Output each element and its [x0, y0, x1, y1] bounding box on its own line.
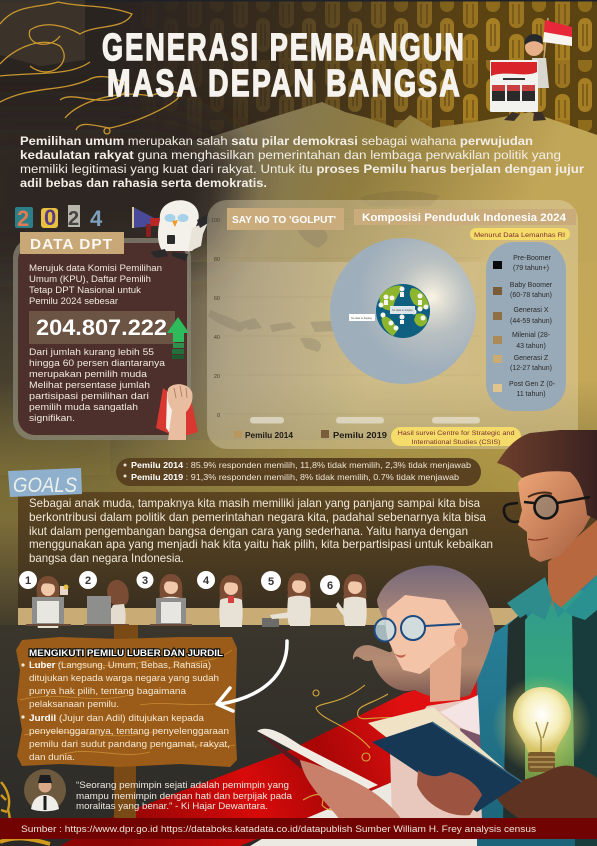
- chart x-axis label pills: [250, 417, 480, 424]
- mega mendung ornament: [0, 2, 179, 134]
- quote: [24, 769, 293, 811]
- book: right: [368, 707, 522, 812]
- gold ornament: [0, 782, 50, 844]
- legend: population groups: Post Gen Z (0-: [509, 381, 556, 388]
- year 2024 cut-out letters: [15, 205, 103, 231]
- girl glasses: [374, 616, 460, 642]
- text block: luber dan jurdil: pelaksanaan pemilu.: [29, 699, 119, 709]
- portrait: Ki Hajar Dewantara: [24, 769, 66, 811]
- statistic: 204.807.222: 204.807.222: [36, 315, 167, 340]
- chart axis: [211, 218, 560, 419]
- chart axis: 0: [217, 413, 220, 419]
- step 2: 2: [85, 575, 91, 587]
- panel: data DPT: [13, 205, 198, 440]
- step 2: [79, 571, 129, 626]
- panel: luber dan jurdil sign: [16, 637, 237, 767]
- callout: pemilu results: Pemilu 2019 : 91,3% responden memilih, 8% tidak memilih, 0.7% tidak menjawab: [131, 473, 459, 482]
- intro paragraph: kedaulatan rakyat guna menghasilkan pemerintahan dan lembaga perwakilan politik yang: [20, 148, 561, 162]
- legend: population groups: 11 tahun): [516, 391, 546, 398]
- chart: population circle with globe: [330, 238, 476, 384]
- text block: luber dan jurdil: punya hak pilih, tentang bagaimana: [29, 686, 187, 696]
- girl blouse: [390, 698, 482, 820]
- man head: [518, 465, 597, 562]
- text block: pemilih muda: Melihat persentase jumlah: [29, 380, 150, 390]
- intro paragraph: memiliki legitimasi yang kuat dari rakyat. Untuk itu proses Pemilu harus berjalan dengan jujur: [20, 162, 584, 176]
- step 4: [197, 571, 243, 627]
- map silhouette: [208, 215, 360, 352]
- text block: goals paragraph: [29, 497, 493, 565]
- man with lightbulb: [477, 430, 597, 846]
- step 5: 5: [268, 576, 274, 588]
- text block: KPU: Tetap DPT Nasional untuk: [29, 285, 142, 295]
- legend: population groups: Generasi Z: [514, 355, 549, 362]
- girl hair: [353, 566, 495, 699]
- step 4: 4: [203, 575, 210, 587]
- man glasses: [504, 496, 590, 522]
- chart axis: 20: [214, 374, 220, 380]
- legend: population groups: (60-78 tahun): [510, 292, 552, 299]
- icon: green up arrow: [167, 317, 189, 359]
- chart tooltips: [349, 306, 415, 321]
- intro paragraph: Pemilihan umum merupakan salah satu pilar demokrasi sebagai wahana perwujudan: [20, 134, 533, 148]
- title: [102, 27, 466, 105]
- step 6: 6: [327, 580, 333, 592]
- panel: goals: [8, 468, 597, 628]
- year 2024 cut-out letters: 0: [44, 205, 56, 230]
- step 5: [261, 571, 311, 627]
- text block: quote: moralitas yang benar.” - Ki Hajar Dewantara.: [76, 801, 268, 811]
- text block: KPU: Merujuk data Komisi Pemilihan: [29, 263, 162, 273]
- step 6: [320, 574, 367, 626]
- chart axis: 40: [214, 335, 220, 341]
- step 3: [136, 572, 192, 626]
- text block: luber dan jurdil: Jurdil (Jujur dan Adil) ditujukan kepada: [29, 713, 205, 723]
- heading: data DPT: DATA DPT: [30, 236, 113, 253]
- icon: globe: [376, 284, 430, 338]
- year 2024 cut-out letters: 2: [17, 206, 29, 231]
- statistic: 204.807.222: [29, 311, 175, 344]
- icon: lightbulb: [492, 675, 592, 775]
- heading: say no to golput: [227, 208, 344, 230]
- legend: population groups: 43 tahun): [516, 343, 546, 350]
- callout: pemilu results: [116, 458, 481, 486]
- text block: quote: “Seorang pemimpin sejati adalah pemimpin yang: [76, 780, 289, 790]
- title: MASA DEPAN BANGSA: [107, 63, 462, 105]
- icon: mascot with megaphone: [133, 200, 210, 261]
- step 3: 3: [142, 575, 148, 587]
- callout: lemhannas: [470, 228, 570, 240]
- text block: pemilih muda: merupakan pemilih muda: [29, 369, 147, 379]
- flag: red and white: [60, 640, 597, 846]
- legend: population groups: (44-59 tahun): [510, 318, 552, 325]
- background: lower dark area: [0, 625, 597, 846]
- heading: data DPT: [20, 232, 124, 254]
- year 2024 cut-out letters: 4: [90, 206, 103, 231]
- intro paragraph: [20, 134, 584, 190]
- text block: quote: mampu memimpin dengan hati dan berpijak pada: [76, 791, 293, 801]
- heading: say no to golput: SAY NO TO 'GOLPUT': [232, 214, 336, 226]
- legend: population groups: Baby Boomer: [510, 282, 553, 289]
- text block: luber dan jurdil: pemilu dari sudut pandang pengamat, rakyat,: [29, 739, 230, 749]
- icon: raised fist with flag: [156, 384, 198, 440]
- icon: character with flag and ballot board: [490, 18, 572, 121]
- text block: goals paragraph: Sebagai anak muda, tampaknya kita masih memiliki jalan yang panjang sampai kita bisa: [29, 497, 481, 510]
- text block: luber dan jurdil: ditujukan kepada warga negara yang sudah: [29, 673, 219, 683]
- text block: luber dan jurdil: [21, 660, 230, 762]
- man hand: [493, 766, 597, 825]
- callout: CSIS survey: [391, 427, 521, 446]
- text block: luber dan jurdil: Luber (Langsung, Umum, Bebas, Rahasia): [29, 660, 211, 670]
- step 1: 1: [25, 575, 31, 587]
- text block: KPU: [29, 263, 162, 306]
- source bar: [0, 818, 597, 839]
- legend: population groups: [486, 242, 566, 411]
- heading: komposisi penduduk: [354, 209, 576, 225]
- callout: pemilu results: Pemilu 2014 : 85.9% responden memilih, 11,8% tidak memilih, 2,3% tidak menjawab: [131, 461, 471, 470]
- text block: goals paragraph: berkontribusi dalam politik dan pemerintahan negara kita, padahal sebenarnya kita bisa: [29, 511, 487, 524]
- text block: pemilih muda: partisipasi pemilihan dari: [29, 391, 149, 401]
- chart axis: 80: [214, 257, 220, 263]
- step 1: [19, 571, 71, 628]
- text block: luber dan jurdil: dan dunia.: [29, 752, 75, 762]
- panel: chart composition: [207, 200, 578, 449]
- girl face: [386, 595, 462, 674]
- text block: goals paragraph: bangsa dan negara Indonesia.: [29, 552, 184, 565]
- heading: luber dan jurdil: MENGIKUTI PEMILU LUBER DAN JURDIL: [29, 648, 223, 659]
- text block: pemilih muda: Dari jumlah kurang lebih 55: [29, 347, 154, 357]
- year 2024 cut-out letters: 2: [68, 208, 79, 230]
- callout: CSIS survey: International Studies (CSIS): [412, 439, 500, 446]
- legend: population groups: Pre-Boomer: [513, 255, 552, 262]
- chart axis: 60: [214, 296, 220, 302]
- legend: pemilu years: Pemilu 2019: [333, 430, 387, 440]
- text block: quote: [76, 780, 293, 811]
- text block: pemilih muda: [29, 347, 165, 423]
- chart tooltips: No data to display: [351, 316, 372, 320]
- text block: KPU: Umum (KPU), Daftar Pemilih: [29, 274, 151, 284]
- legend: pemilu years: [234, 430, 387, 440]
- legend: pemilu years: Pemilu 2014: [245, 430, 293, 440]
- text block: pemilih muda: pemilih muda sangatlah: [29, 402, 138, 412]
- intro paragraph: adil bebas dan rahasia serta demokratis.: [20, 176, 267, 190]
- man torso: [477, 565, 597, 846]
- text block: pemilih muda: hingga 60 persen diantaranya: [29, 358, 165, 368]
- signpost: [114, 625, 138, 820]
- book: left: [257, 729, 378, 790]
- legend: population groups: Generasi X: [513, 307, 549, 314]
- text block: KPU: Pemilu 2024 sebesar: [29, 296, 118, 306]
- chart axis: 100: [211, 218, 220, 224]
- text block: goals paragraph: ikut dalam pengembangan bangsa dengan cara yang sederhana. Yaitu hanya dengan: [29, 525, 468, 538]
- callout: CSIS survey: Hasil survei Centre for Strategic and: [398, 430, 515, 437]
- girl hands: [300, 760, 402, 820]
- heading: komposisi penduduk: Komposisi Penduduk Indonesia 2024: [362, 212, 567, 224]
- legend: population groups: Milenial (28-: [512, 332, 551, 339]
- chart tooltips: No data to display: [392, 308, 413, 312]
- callout: lemhannas: Menurut Data Lemanhas RI: [474, 232, 565, 239]
- arrow: [217, 641, 287, 711]
- girl with book: [257, 566, 522, 820]
- heading: goals: GOALS: [13, 474, 77, 497]
- legend: population groups: (79 tahun+): [513, 265, 549, 272]
- legend: population groups: (12-27 tahun): [510, 365, 552, 372]
- text block: goals paragraph: menggunakan apa yang menjadi hak kita yaitu hak pilih, kita berpartisipasi untuk kebaikan: [29, 538, 493, 551]
- text block: pemilih muda: signifikan.: [29, 413, 75, 423]
- source bar: Sumber : https://www.dpr.go.id https://databoks.katadata.co.id/datapublish Sumber William H. Frey analysis census: [21, 824, 536, 835]
- text block: luber dan jurdil: penyelenggaranya, tentang penyelenggaraan: [29, 726, 229, 736]
